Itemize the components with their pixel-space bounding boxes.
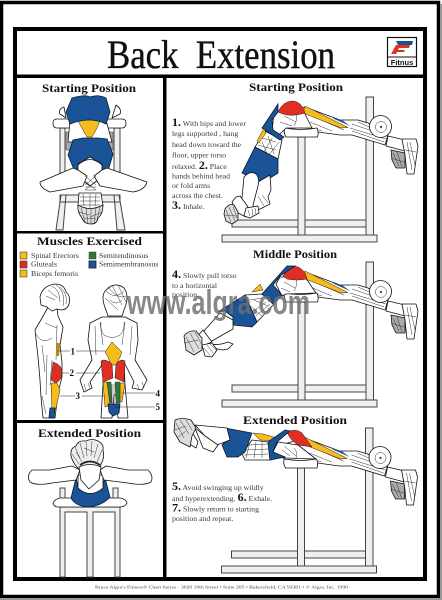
instructions 5 to 7: 5. Avoid swinging up wildly — [172, 479, 264, 493]
illustration: side view figure — [35, 284, 70, 418]
illustration: machine and legs, extended — [222, 428, 418, 573]
illustration: hanging torso, starting — [224, 101, 312, 224]
watermark: www.algra.com — [126, 284, 310, 322]
heading: extended position: Extended Position — [38, 426, 141, 440]
instructions 1 to 3: across the chest. — [172, 191, 223, 200]
panel: middle position — [172, 247, 418, 407]
heading: starting position: Starting Position — [42, 81, 136, 95]
title: Back Extension — [107, 32, 335, 77]
heading: middle position: Middle Position — [253, 247, 337, 261]
muscle numbers: 1 — [70, 346, 76, 356]
instruction 4: position. — [172, 290, 199, 299]
instructions 1 to 3: hands behind head — [172, 172, 230, 180]
muscle numbers — [70, 346, 160, 412]
instructions 5 to 7: 7. Slowly return to starting — [172, 500, 259, 514]
instructions 1 to 3: or fold arms — [172, 181, 210, 190]
legend: Biceps femoris — [31, 269, 78, 278]
panel: right starting position — [172, 80, 418, 242]
muscle numbers: 3 — [76, 391, 80, 401]
heading: right extended position: Extended Position — [243, 413, 347, 427]
instructions 1 to 3: 3. Inhale. — [172, 198, 204, 212]
instructions 1 to 3: floor, upper torso — [172, 150, 226, 160]
heading: muscles exercised: Muscles Exercised — [37, 234, 142, 248]
legend — [20, 251, 158, 278]
legend: Spinal Erectors — [31, 251, 79, 260]
instruction 4 — [172, 267, 237, 299]
illustration: back view figure — [80, 285, 147, 418]
instructions 1 to 3: relaxed. 2. Place — [172, 158, 227, 172]
instructions 1 to 3: 1. With hips and lower — [172, 115, 246, 129]
panel: left starting position — [40, 81, 147, 230]
legend: Gluteals — [31, 260, 57, 268]
illustration: torso, middle — [184, 266, 316, 357]
muscle numbers: 4 — [156, 388, 160, 398]
illustration: machine and legs, starting — [222, 97, 418, 242]
instructions 1 to 3: legs supported , hang — [172, 129, 238, 138]
icon: Fitnus logo — [387, 38, 417, 67]
icon: Fitnus logo: Fitnus — [391, 58, 413, 67]
muscle numbers: 5 — [156, 402, 160, 412]
panel: right extended position — [172, 413, 418, 573]
illustration: machine and legs, middle — [222, 262, 418, 407]
instructions 1 to 3 — [172, 115, 246, 212]
illustration: top view of starting position — [40, 96, 147, 230]
instructions 5 to 7: position and repeat. — [172, 514, 233, 523]
legend: Semimembranosus — [99, 260, 158, 268]
instruction 4: 4. Slowly pull torso — [172, 267, 237, 281]
instruction 4: to a horizontal — [172, 281, 218, 290]
illustration: front view of extended position — [28, 440, 152, 577]
illustration: torso, extended — [174, 418, 316, 460]
muscle callout lines — [58, 351, 155, 407]
heading: right starting position: Starting Position — [249, 80, 343, 94]
panel: left extended position — [28, 426, 152, 577]
instructions 5 to 7: and hyperextending. 6. Exhale. — [172, 490, 272, 504]
footer credit: Bruce Algra's Fitness® Chart Series · 3020 10th Street • Suite 205 • Bakersfield, CA 93301 • © Algra, Inc. 1990 — [95, 584, 349, 590]
instructions 5 to 7 — [172, 479, 272, 523]
panel: muscles exercised — [20, 234, 160, 418]
instructions 1 to 3: head down toward the — [172, 140, 242, 149]
legend: Semitendinosus — [99, 251, 148, 260]
muscle numbers: 2 — [70, 368, 74, 378]
